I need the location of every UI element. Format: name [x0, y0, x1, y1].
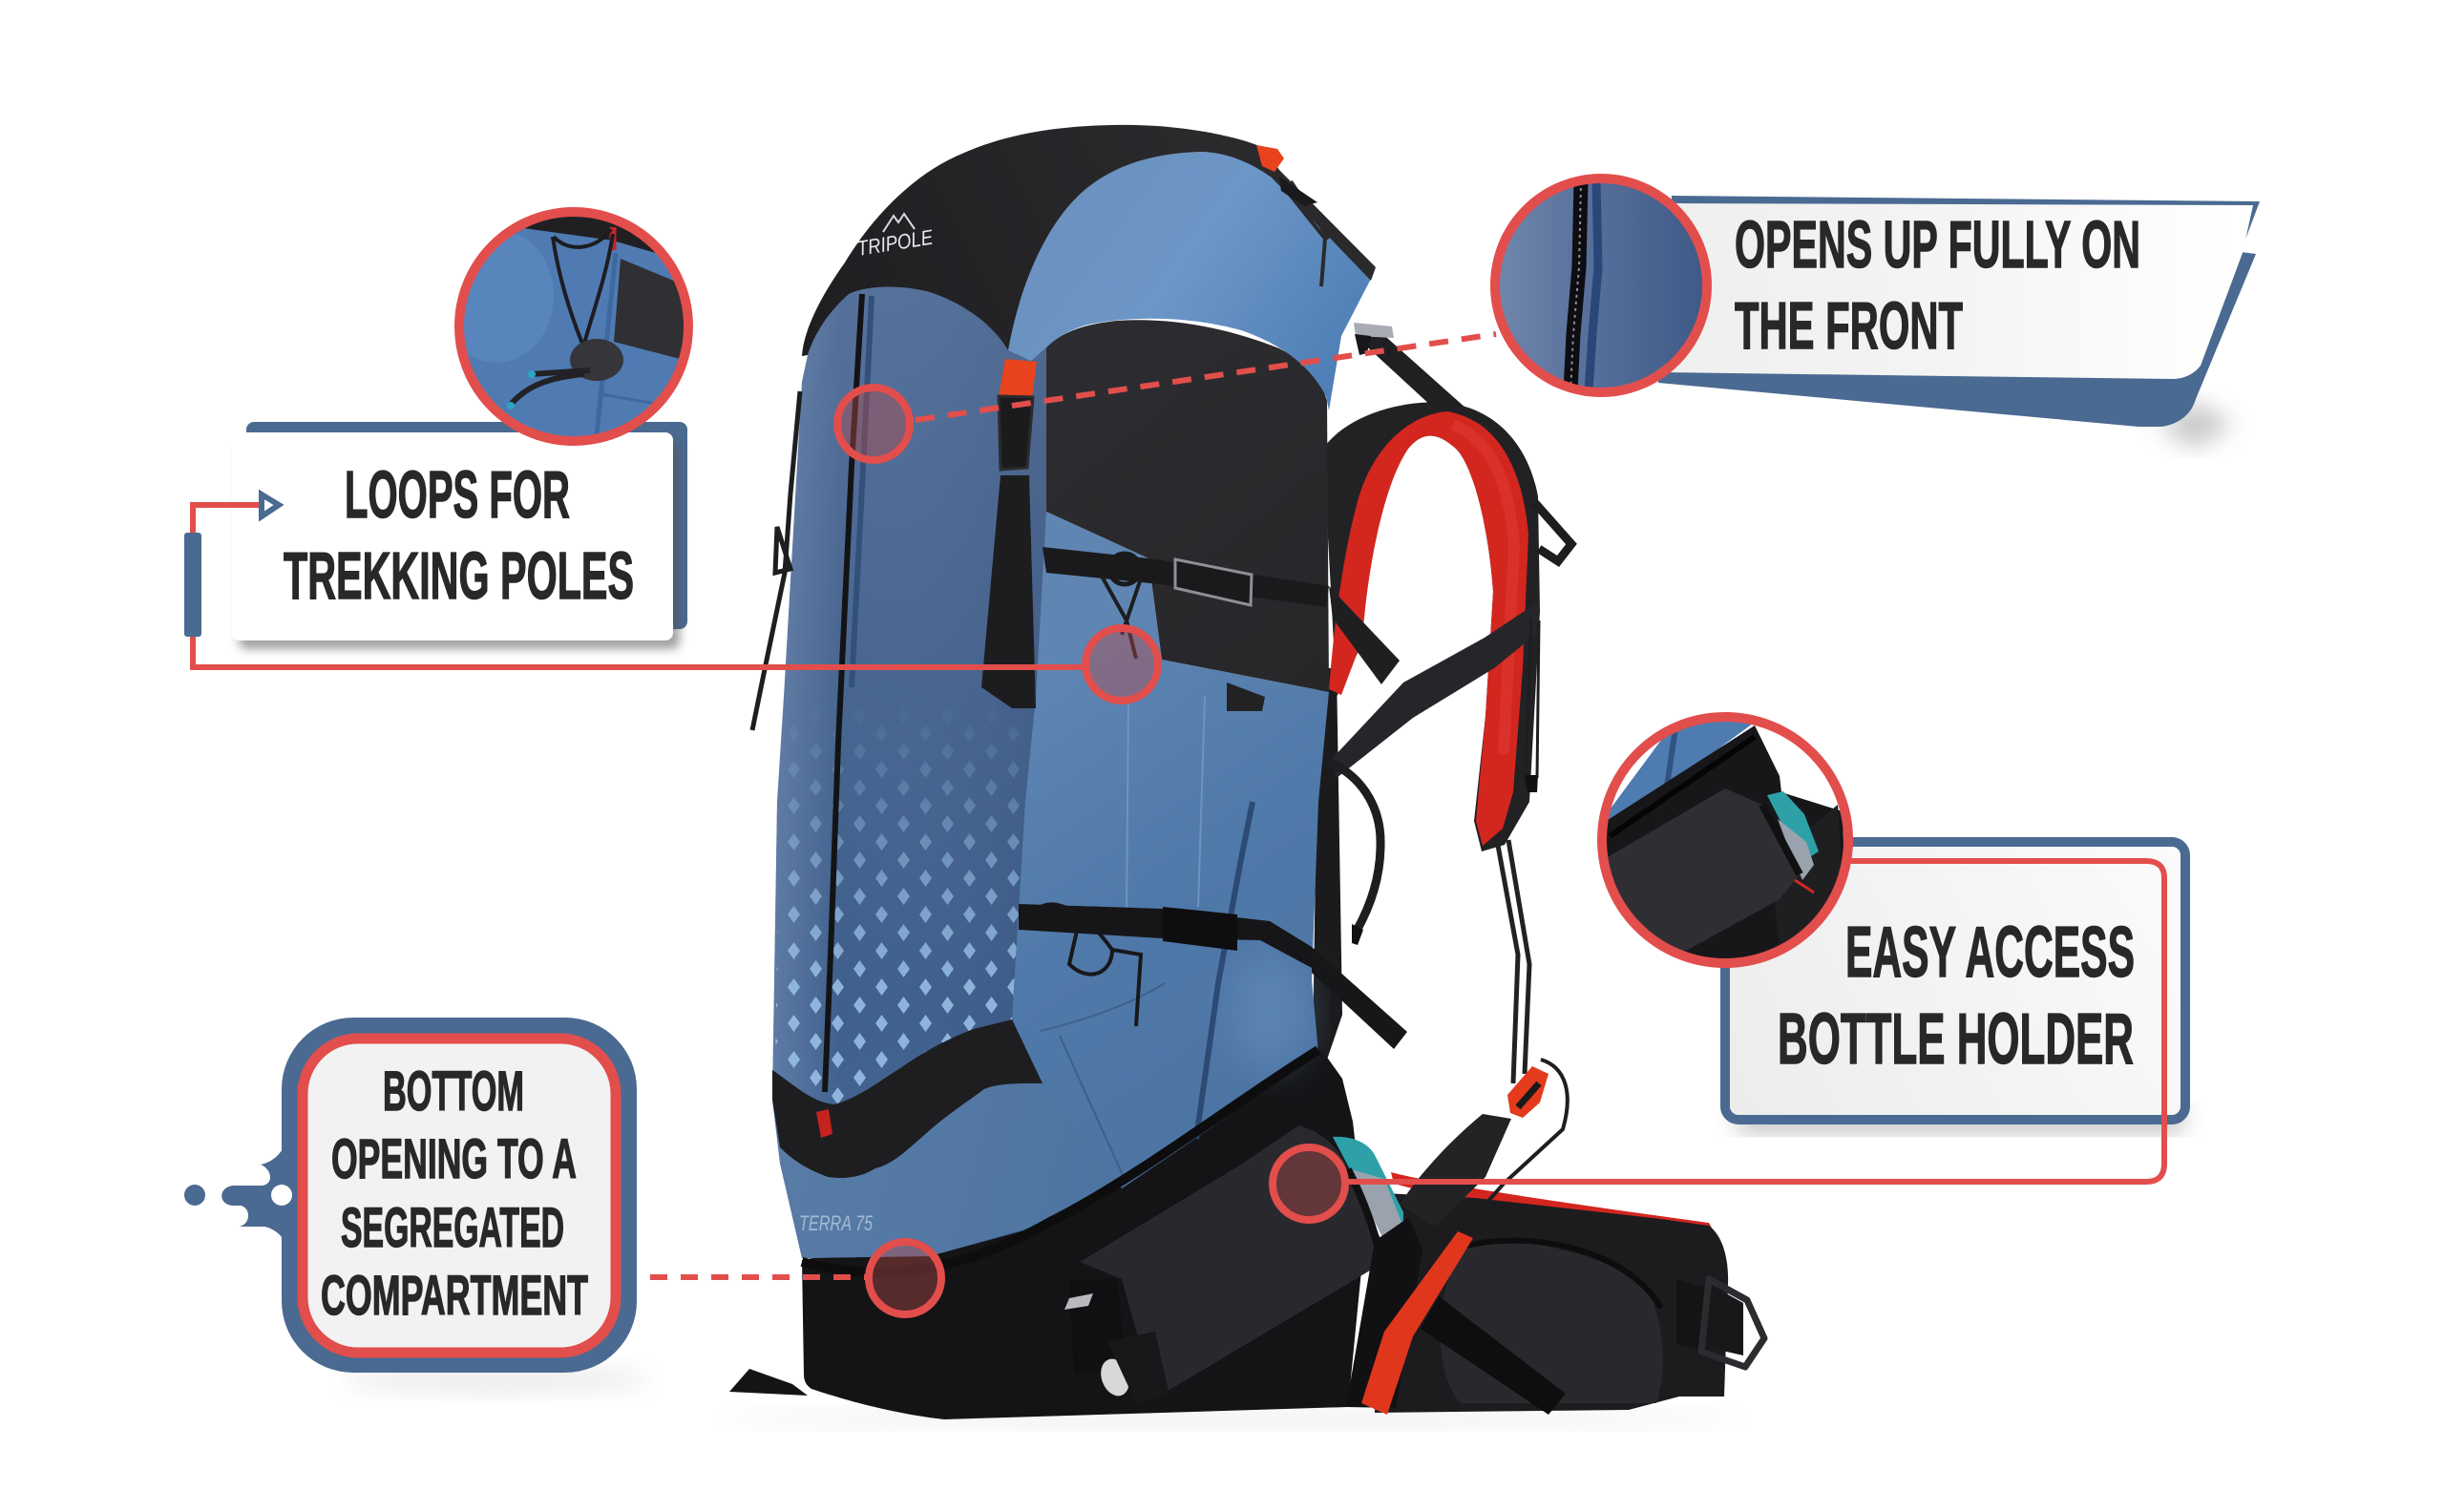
- heading: loops: TREKKING POLES: [284, 538, 634, 613]
- panel: opens up fully on the front: [1658, 196, 2260, 449]
- black belt strap: [1421, 1296, 1566, 1415]
- tail hole: [271, 1185, 292, 1206]
- bubble shadow: [344, 1364, 649, 1395]
- side panel black: [1046, 320, 1329, 692]
- back strip: [1313, 668, 1342, 1060]
- side bar: [184, 533, 201, 637]
- pocket gap tab: [1227, 682, 1265, 711]
- ground shadow: [726, 1409, 1738, 1428]
- top blue panel: [1008, 152, 1371, 410]
- foot tab: [729, 1369, 808, 1396]
- zipper pull: [816, 1109, 832, 1138]
- lower base black: [802, 1045, 1365, 1419]
- lower blue panel: [780, 1083, 1122, 1258]
- hip fin: [1346, 1217, 1422, 1408]
- heading: easy access: BOTTLE HOLDER: [1778, 998, 2134, 1079]
- lower compression strap: [1019, 904, 1407, 1049]
- left side cords: [752, 391, 800, 730]
- front zipper: [825, 294, 862, 1092]
- base zipper: [802, 1050, 1318, 1272]
- adjuster strap with orange buckle: [1400, 1060, 1568, 1227]
- heading: loops: [284, 457, 634, 613]
- heading: loops: LOOPS FOR: [345, 457, 570, 532]
- detail circle: zipper: [1495, 178, 1707, 392]
- heading: bottom opening: [321, 1060, 588, 1327]
- panel: easy access bottle holder: [1725, 842, 2185, 1132]
- side pocket blue: [1012, 512, 1329, 1188]
- zipper navy fold: [852, 296, 872, 687]
- orange strap: [1361, 1231, 1473, 1415]
- heading: opens up: OPENS UP FULLY ON: [1735, 207, 2140, 282]
- bottle: [1333, 1137, 1403, 1241]
- front panel sheen: [772, 286, 1066, 1258]
- wave black band: [772, 1019, 1043, 1178]
- detail circle: bottle: [1594, 717, 1848, 969]
- marker: trekking loop: [1085, 628, 1158, 701]
- bottle pocket: [1064, 1125, 1383, 1403]
- callout line: bottom compartment: [650, 1274, 867, 1280]
- marker: bottom compartment: [869, 1242, 941, 1314]
- marker: bottle holder: [1273, 1147, 1345, 1220]
- model label: TERRA 75: [799, 1211, 874, 1235]
- backpack illustration: [729, 125, 1764, 1419]
- pocket seams: [1041, 697, 1253, 1184]
- leader line: trekking loop: [193, 505, 1085, 667]
- heading: bottom opening: SEGREGATED: [341, 1197, 564, 1259]
- heading: bottom opening: OPENING TO A: [331, 1128, 577, 1190]
- diamond print: [775, 728, 1020, 1103]
- brand logo: TRIPOLE: [855, 225, 935, 261]
- load lifter strap: [1354, 323, 1466, 409]
- bubble tail: [184, 1141, 286, 1246]
- detail circle: loops: [439, 205, 688, 441]
- upper compression strap: [1043, 547, 1400, 684]
- heading: bottom opening: BOTTOM: [383, 1060, 524, 1123]
- pocket highlight: [1232, 955, 1308, 1069]
- drawcord at top: [1256, 145, 1329, 286]
- front panel: [772, 286, 1066, 1258]
- callout line: opens up fully: [916, 334, 1496, 420]
- webbing straps behind: [1329, 502, 1571, 1083]
- upper front strap with buckle: [981, 359, 1037, 708]
- heading: opens up: THE FRONT: [1735, 288, 1963, 363]
- heading: easy access: EASY ACCESS: [1845, 912, 2135, 992]
- heading: bottom opening: COMPARTMENT: [321, 1265, 588, 1327]
- heading: opens up: [1735, 207, 2140, 363]
- marker: zipper: [837, 388, 910, 460]
- shoulder strap arch: [1323, 402, 1540, 851]
- panel: loops for trekking poles: [232, 422, 687, 649]
- arrow head: [262, 494, 279, 516]
- leader line: bottle holder: [1345, 861, 2164, 1182]
- hip belt buckle: [1701, 1279, 1764, 1367]
- panel: bottom opening to a segregated compartment: [184, 1018, 637, 1373]
- heading: easy access: [1778, 912, 2135, 1079]
- top cap black: [802, 125, 1376, 356]
- infographic canvas: [184, 124, 2260, 1425]
- hip belt pouch: [1375, 1172, 1728, 1413]
